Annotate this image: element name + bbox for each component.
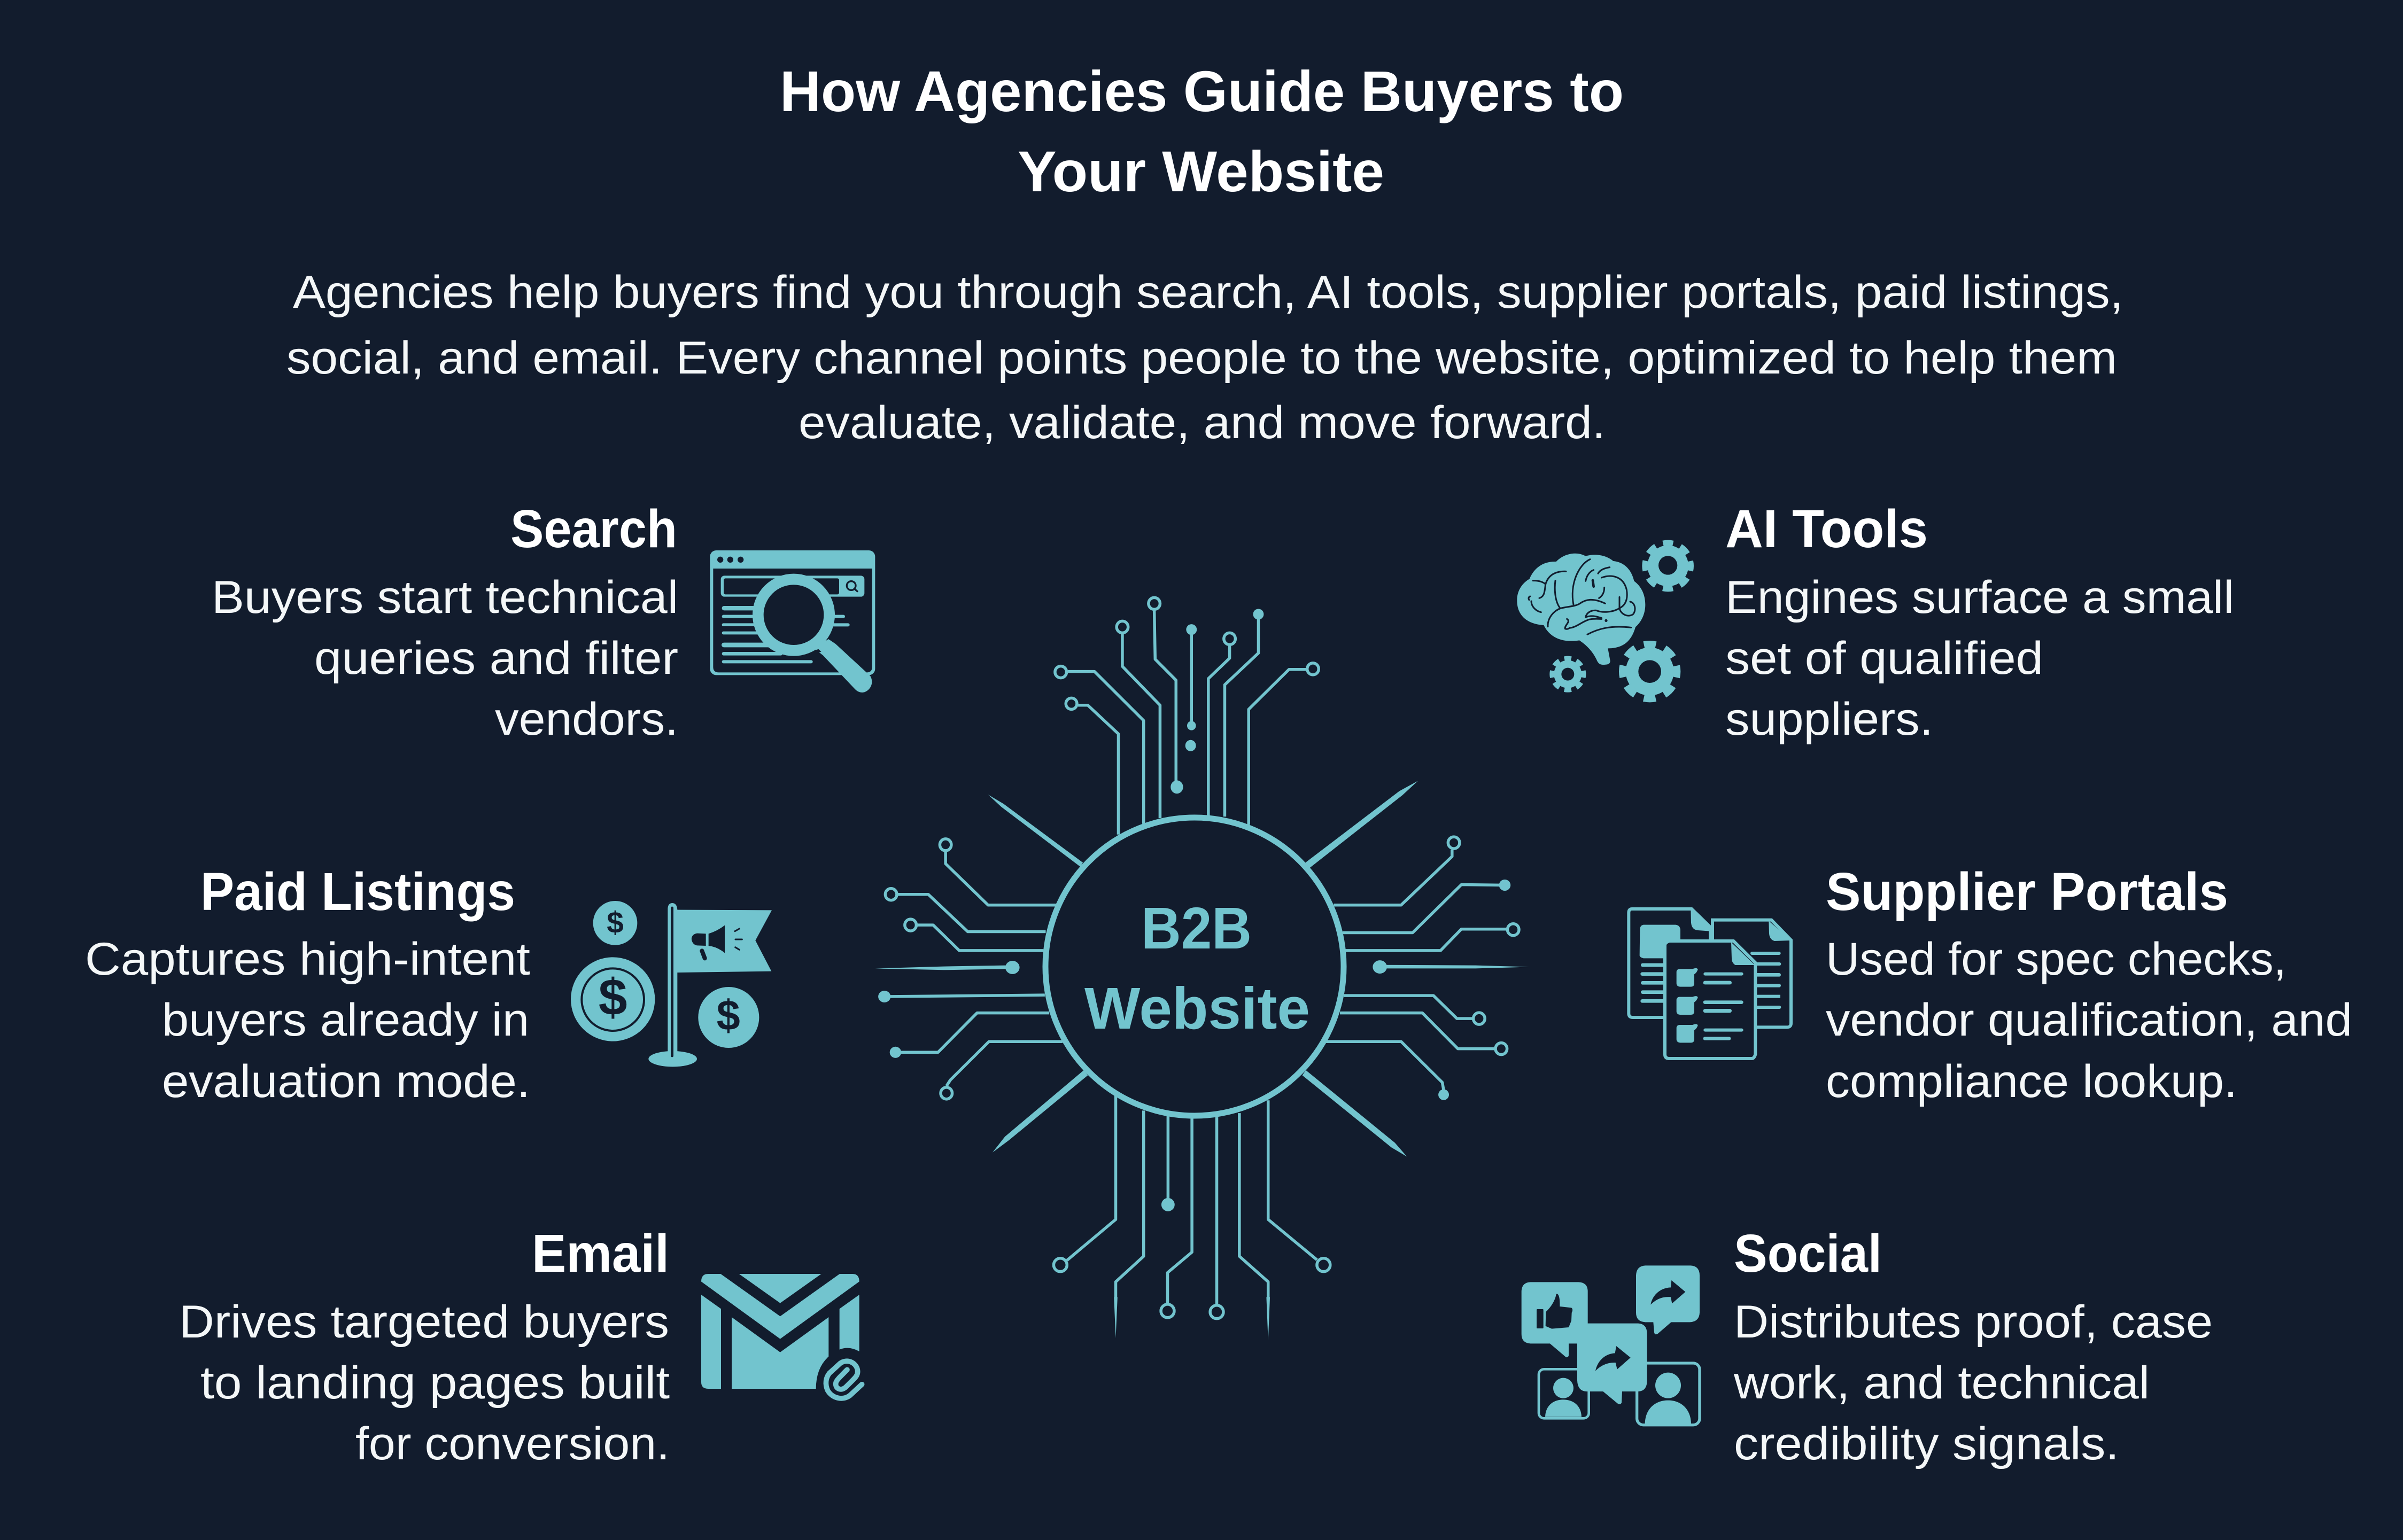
search text block: Search	[510, 499, 677, 559]
email text block: for conversion.	[355, 1418, 670, 1469]
center label: B2B	[1141, 896, 1252, 961]
icon: social bubbles and people	[1522, 1265, 1700, 1425]
center label	[1084, 896, 1310, 1041]
icon: documents	[1629, 909, 1791, 1059]
search text block	[212, 499, 678, 745]
search text block: vendors.	[495, 694, 678, 745]
intro paragraph: evaluate, validate, and move forward.	[799, 397, 1606, 448]
icon: flag with coins: $	[717, 992, 740, 1039]
social text block: Distributes proof, case	[1734, 1296, 2213, 1348]
icon: browser search	[710, 550, 875, 693]
intro paragraph: Agencies help buyers find you through search, AI tools, supplier portals, paid listings,	[293, 267, 2123, 318]
icon: brain and gears	[1517, 543, 1690, 698]
search text block: queries and filter	[314, 633, 678, 684]
ai tools text block: suppliers.	[1725, 694, 1933, 745]
supplier portals text block: vendor qualification, and	[1826, 994, 2352, 1046]
supplier portals text block: compliance lookup.	[1826, 1056, 2237, 1107]
paid listings text block: Captures high-intent	[85, 934, 530, 985]
search text block: Buyers start technical	[212, 572, 678, 623]
supplier portals text block	[1826, 862, 2352, 1107]
icon: flag with coins	[571, 901, 772, 1067]
intro paragraph	[286, 267, 2123, 448]
social text block: work, and technical	[1733, 1357, 2150, 1409]
email text block: Email	[532, 1224, 669, 1284]
paid listings text block: buyers already in	[162, 994, 529, 1046]
icon: flag with coins: $	[599, 968, 627, 1026]
email text block: Drives targeted buyers	[179, 1296, 669, 1348]
center label: Website	[1084, 976, 1310, 1041]
ai tools text block	[1725, 499, 2234, 745]
social text block	[1733, 1224, 2213, 1469]
email text block: to landing pages built	[200, 1357, 670, 1409]
intro paragraph: social, and email. Every channel points people to the website, optimized to help them	[286, 332, 2117, 384]
title: How Agencies Guide Buyers to	[780, 59, 1624, 123]
paid listings text block: evaluation mode.	[162, 1056, 530, 1107]
paid listings text block	[85, 862, 530, 1107]
title: Your Website	[1018, 139, 1384, 204]
central circuit diagram	[875, 597, 1529, 1341]
email text block	[179, 1224, 670, 1469]
supplier portals text block: Used for spec checks,	[1826, 934, 2286, 985]
ai tools text block: Engines surface a small	[1725, 572, 2234, 623]
ai tools text block: set of qualified	[1725, 633, 2043, 684]
icon: email with paperclip	[701, 1274, 862, 1398]
ai tools text block: AI Tools	[1725, 499, 1928, 559]
supplier portals text block: Supplier Portals	[1826, 862, 2228, 922]
paid listings text block: Paid Listings	[200, 862, 515, 922]
icon: flag with coins: $	[607, 906, 624, 940]
social text block: credibility signals.	[1734, 1418, 2119, 1469]
title	[780, 59, 1624, 204]
social text block: Social	[1734, 1224, 1882, 1284]
